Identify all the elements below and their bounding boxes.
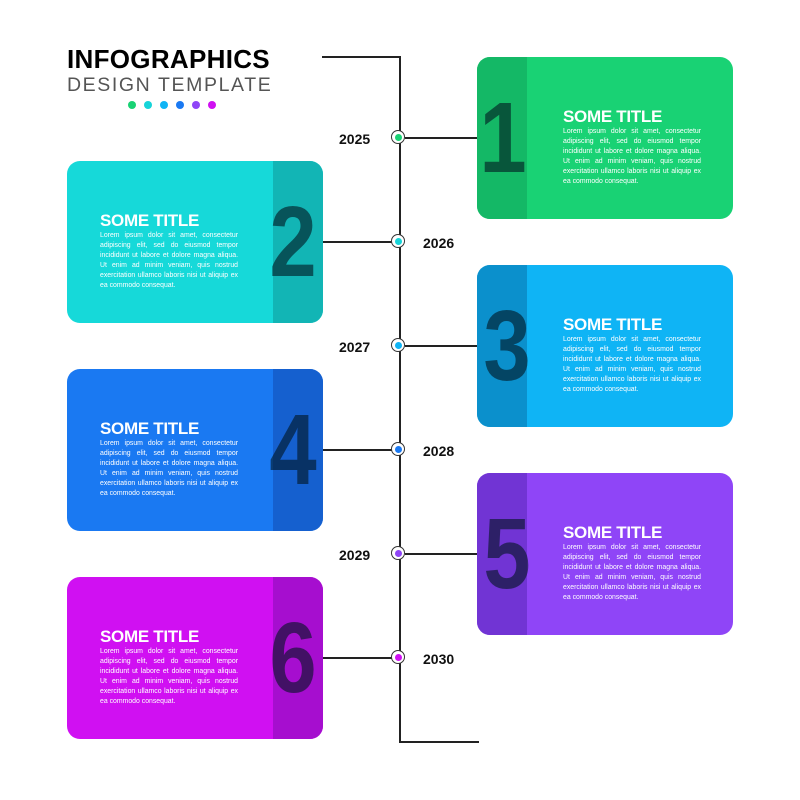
card 2: Lorem ipsum dolor sit amet, consectetur adipiscing elit, sed do eiusmod tempor incididunt ut labore et dolore magna aliqua. Ut enim ad minim veniam, quis nostrud exercitation ullamco laboris nisi ut aliquip ex ea commodo consequat.: [100, 232, 238, 289]
dot 2026: [391, 234, 405, 248]
card 5: SOME TITLE: [563, 523, 662, 542]
card 6: 6: [269, 602, 317, 714]
card 6: SOME TITLE: [100, 627, 199, 646]
dot 2027: [391, 338, 405, 352]
card 3: [477, 265, 733, 427]
card 4: [67, 369, 323, 531]
year 2025: 2025: [339, 131, 370, 147]
card 5: Lorem ipsum dolor sit amet, consectetur adipiscing elit, sed do eiusmod tempor incididunt ut labore et dolore magna aliqua. Ut enim ad minim veniam, quis nostrud exercitation ullamco laboris nisi ut aliquip ex ea commodo consequat.: [563, 544, 701, 601]
card 6: Lorem ipsum dolor sit amet, consectetur adipiscing elit, sed do eiusmod tempor incididunt ut labore et dolore magna aliqua. Ut enim ad minim veniam, quis nostrud exercitation ullamco laboris nisi ut aliquip ex ea commodo consequat.: [100, 648, 238, 705]
title: [67, 44, 272, 109]
year 2030: 2030: [423, 651, 454, 667]
year 2027: 2027: [339, 339, 370, 355]
card 1: SOME TITLE: [563, 107, 662, 126]
card 1: [477, 57, 733, 219]
card 4: Lorem ipsum dolor sit amet, consectetur adipiscing elit, sed do eiusmod tempor incididunt ut labore et dolore magna aliqua. Ut enim ad minim veniam, quis nostrud exercitation ullamco laboris nisi ut aliquip ex ea commodo consequat.: [100, 440, 238, 497]
year 2026: 2026: [423, 235, 454, 251]
card 3: 3: [483, 290, 531, 402]
card 6: [67, 577, 323, 739]
dot 2030: [391, 650, 405, 664]
card 3: Lorem ipsum dolor sit amet, consectetur adipiscing elit, sed do eiusmod tempor incididunt ut labore et dolore magna aliqua. Ut enim ad minim veniam, quis nostrud exercitation ullamco laboris nisi ut aliquip ex ea commodo consequat.: [563, 336, 701, 393]
card 1: 1: [479, 82, 527, 194]
title: INFOGRAPHICS: [67, 44, 270, 74]
card 5: [477, 473, 733, 635]
card 4: 4: [269, 394, 317, 506]
card 2: 2: [269, 186, 317, 298]
timeline line: [322, 56, 479, 743]
card 5: 5: [483, 498, 531, 610]
year 2028: 2028: [423, 443, 454, 459]
card 2: [67, 161, 323, 323]
dot 2029: [391, 546, 405, 560]
year 2029: 2029: [339, 547, 370, 563]
dot 2028: [391, 442, 405, 456]
card 1: Lorem ipsum dolor sit amet, consectetur adipiscing elit, sed do eiusmod tempor incididunt ut labore et dolore magna aliqua. Ut enim ad minim veniam, quis nostrud exercitation ullamco laboris nisi ut aliquip ex ea commodo consequat.: [563, 128, 701, 185]
card 2: SOME TITLE: [100, 211, 199, 230]
title: DESIGN TEMPLATE: [67, 74, 272, 96]
card 4: SOME TITLE: [100, 419, 199, 438]
card 3: SOME TITLE: [563, 315, 662, 334]
dot 2025: [391, 130, 405, 144]
